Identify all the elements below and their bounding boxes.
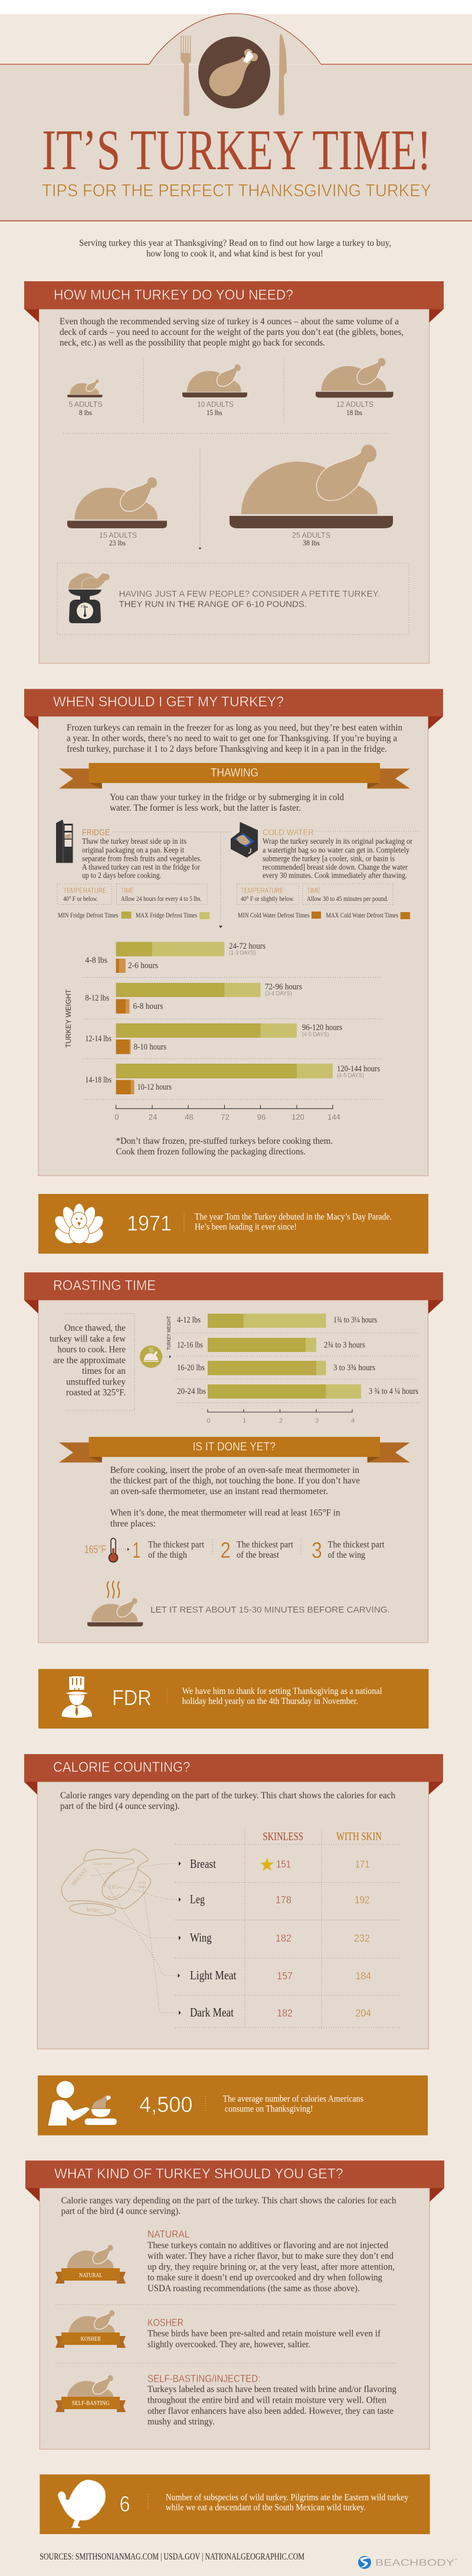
- row 20-24 lbs: 20-24 lbs: [177, 1387, 206, 1396]
- icon: turkey 5 adults: [67, 379, 103, 397]
- fridge temperature and time boxes: [57, 884, 207, 904]
- label: 12 adults: 18 lbs: [346, 408, 362, 417]
- fridge method: up to 2 days before cooking.: [82, 871, 162, 880]
- self-basting description: SELF-BASTING/INJECTED:: [148, 2373, 260, 2384]
- axis: 4: [351, 1417, 355, 1424]
- cold water method: [263, 828, 420, 880]
- natural description: NATURAL: [148, 2228, 190, 2240]
- row 12-16 lbs: 12-16 lbs: [177, 1341, 203, 1350]
- row 14-18 lbs: 120-144 hours: [337, 1064, 380, 1074]
- row 12-14 lbs: 12-14 lbs: [85, 1034, 112, 1044]
- icon: fridge: [56, 820, 73, 863]
- row 14-18 lbs: [85, 1064, 380, 1094]
- text block: Calorie ranges vary depending on the part of the turkey. This chart shows the calories for each: [61, 2196, 396, 2206]
- row: wing: 232: [354, 1932, 370, 1944]
- row 4-12 lbs: 1¾ to 3¼ hours: [333, 1315, 377, 1325]
- label: 25 adults: 25 ADULTS: [292, 531, 330, 539]
- row: leg: 192: [355, 1894, 369, 1906]
- row: dark meat: [190, 2005, 371, 2019]
- icon: natural turkey badge: [55, 2244, 126, 2284]
- cold water method: submerge the turkey [a cooler, sink, or basin is: [263, 854, 395, 863]
- label: 10 adults: 15 lbs: [206, 408, 222, 417]
- text block: hours to cook. Here: [58, 1344, 126, 1355]
- text block: We have him to thank for setting Thanksgiving as a national: [182, 1686, 382, 1696]
- text block: Calorie ranges vary depending on the part of the turkey. This chart shows the calories for each: [60, 1791, 395, 1801]
- cold water method: COLD WATER: [263, 828, 314, 837]
- cold water method: recommended] breast side down. Change the water: [263, 863, 408, 871]
- axis: 144: [327, 1113, 340, 1121]
- sources: SOURCES: SMITHSONIANMAG.COM | USDA.GOV | NATIONALGEOGRAPHIC.COM: [40, 2552, 304, 2562]
- diagram: turkey parts: DARK: [139, 1881, 146, 1885]
- label: 10 adults: [197, 400, 234, 417]
- text block: You can thaw your turkey in the fridge or by submerging it in cold: [110, 792, 344, 802]
- label: 5 adults: 5 ADULTS: [68, 400, 103, 409]
- axis: 72: [221, 1113, 230, 1121]
- axis: 2: [279, 1417, 283, 1424]
- cold water method: every 30 minutes. Cook immediately after thawing.: [263, 871, 407, 880]
- intro text: [79, 238, 391, 259]
- text block: an oven-safe thermometer, use an instant read thermometer.: [110, 1486, 328, 1496]
- cold water temperature and time boxes: [237, 884, 393, 904]
- bar chart: defrost times: [64, 942, 383, 1121]
- thermometer reading: [84, 1538, 129, 1562]
- icon: turkey 12 adults: [316, 357, 394, 397]
- step 1: of the thigh: [148, 1550, 187, 1560]
- number: 6: [119, 2492, 130, 2516]
- label: 25 adults: [292, 531, 330, 547]
- icon: self-basting turkey badge: SELF-BASTING: [72, 2400, 110, 2407]
- self-basting description: [148, 2373, 396, 2427]
- text block: [60, 317, 404, 348]
- text block: roasted at 325°F.: [66, 1388, 126, 1397]
- step 2: [221, 1538, 294, 1563]
- cold water method: a watertight bag so no water can get in. Completely: [263, 845, 409, 854]
- icon: kosher turkey badge: KOSHER: [81, 2335, 101, 2343]
- fridge method: A thawed turkey can rest in the fridge for: [82, 863, 200, 871]
- row: breast: 151: [276, 1858, 291, 1870]
- diagram: turkey parts: MEAT: [139, 1886, 147, 1889]
- row 16-20 lbs: 16-20 lbs: [177, 1363, 205, 1373]
- diagram: turkey parts: LEG: [109, 1884, 119, 1890]
- icon: scale with petite turkey: 7 lbs: [81, 606, 88, 609]
- text block: The year Tom the Turkey debuted in the Macy’s Day Parade.: [195, 1212, 392, 1222]
- legend: MIN Fridge Defrost Times: [58, 911, 119, 919]
- icon: turkey fan: [51, 1203, 107, 1246]
- label: 15 adults: 23 lbs: [109, 538, 126, 547]
- fridge method: original packaging on a pan. Keep it: [82, 845, 184, 854]
- callout: petite turkey: THEY RUN IN THE RANGE OF 6-10 POUNDS.: [119, 599, 307, 610]
- header banner: [0, 14, 472, 222]
- text block: part of the bird (4 ounce serving).: [60, 1801, 180, 1811]
- row 12-14 lbs: 8-10 hours: [133, 1042, 166, 1052]
- row 4-8 lbs: 2-6 hours: [128, 961, 158, 970]
- axis: 1: [242, 1417, 246, 1424]
- row 12-14 lbs: (4-5 DAYS): [302, 1032, 329, 1038]
- icon: plate with drumstick: [198, 37, 270, 108]
- icon: turkey 25 adults: [230, 443, 393, 528]
- row: wing: 182: [276, 1932, 291, 1944]
- row: leg: Leg: [190, 1892, 205, 1906]
- panel: how much turkey: [24, 281, 444, 663]
- row 8-12 lbs: 6-8 hours: [133, 1002, 163, 1011]
- axis: 0: [114, 1113, 119, 1121]
- row 12-16 lbs: 2¾ to 3 hours: [324, 1341, 365, 1350]
- label: 15 adults: [99, 531, 137, 547]
- row 12-14 lbs: 96-120 hours: [302, 1023, 342, 1032]
- fact band: 4,500: [38, 2075, 428, 2136]
- row 12-16 lbs: [177, 1338, 365, 1352]
- text block: [195, 1212, 392, 1232]
- axis: 3: [315, 1417, 319, 1424]
- footnote: Cook them frozen following the packaging directions.: [116, 1147, 306, 1157]
- icon: turkey 15 adults: [67, 476, 167, 528]
- table grid: [175, 1828, 401, 2030]
- icon: cooler: [231, 822, 258, 858]
- panel: when should I get my turkey: [24, 689, 443, 1176]
- step 1: The thickest part: [148, 1540, 205, 1549]
- row: light meat: 184: [355, 1970, 371, 1982]
- fridge method: separate from fresh fruits and vegetables.: [82, 854, 202, 863]
- row 14-18 lbs: 14-18 lbs: [85, 1075, 112, 1085]
- text block: deck of cards – you need to account for the weight of the parts you don’t eat (the giblets, bones,: [60, 327, 404, 337]
- diagram: turkey parts: [61, 1849, 150, 1917]
- icon: self-basting turkey badge: [55, 2374, 126, 2412]
- axis: [207, 1409, 355, 1424]
- row 12-14 lbs: [85, 1023, 342, 1054]
- heading: WHEN SHOULD I GET MY TURKEY?: [53, 694, 284, 710]
- icon: star: [260, 1858, 274, 1871]
- natural description: [148, 2228, 395, 2294]
- text block: He’s been leading it ever since!: [195, 1222, 297, 1232]
- icon: person eating: [48, 2081, 117, 2126]
- row 16-20 lbs: 3 to 3¾ hours: [333, 1363, 375, 1373]
- icon: turkey 10 adults: [182, 363, 247, 397]
- text block: Before cooking, insert the probe of an oven-safe meat thermometer in: [110, 1465, 359, 1475]
- kosher description: KOSHER: [148, 2317, 183, 2328]
- text block: Even though the recommended serving size of turkey is 4 ounces – about the same volume of a: [60, 317, 399, 327]
- label: 15 adults: 15 ADULTS: [99, 531, 137, 539]
- axis: 0: [207, 1417, 211, 1424]
- cold water method: Wrap the turkey securely in its original packaging or: [263, 837, 412, 845]
- fridge method: FRIDGE: [82, 828, 110, 837]
- axis: 24: [149, 1113, 157, 1121]
- fridge temperature and time boxes: 40° F or below.: [63, 894, 98, 903]
- row: leg: 178: [276, 1894, 291, 1906]
- axis: 96: [257, 1113, 266, 1121]
- cold water temperature and time boxes: TEMPERATURE: [241, 886, 284, 895]
- ribbon: thawing: [59, 763, 410, 789]
- text block: times for an: [82, 1366, 126, 1376]
- text block: fresh turkey, purchase it 1 to 2 days before Thanksgiving and keep it in a pan in the fridge.: [67, 744, 387, 754]
- axis label: TURKEY WEIGHT: [166, 1316, 172, 1350]
- text block: the thickest part of the thigh, not touching the bone. If you don’t have: [110, 1476, 360, 1486]
- text block: Frozen turkeys can remain in the freezer for as long as you need, but they’re best eaten within: [67, 723, 402, 733]
- heading: WHAT KIND OF TURKEY SHOULD YOU GET?: [54, 2166, 343, 2182]
- fact band: FDR: [38, 1669, 428, 1729]
- step 3: The thickest part: [328, 1540, 385, 1549]
- row 20-24 lbs: 3 ¾ to 4 ¼ hours: [369, 1387, 418, 1396]
- icon: thermometer: [109, 1538, 118, 1562]
- text block: The average number of calories Americans: [223, 2094, 363, 2104]
- panel: calorie counting: [24, 1754, 443, 2049]
- legend: [58, 911, 410, 919]
- label: 12 adults: 12 ADULTS: [336, 400, 373, 409]
- self-basting description: mushy and stringy.: [148, 2417, 215, 2427]
- step 2: The thickest part: [237, 1540, 294, 1549]
- heading: ROASTING TIME: [53, 1278, 156, 1294]
- step 3: [312, 1538, 385, 1563]
- panel: what kind of turkey: [25, 2160, 444, 2449]
- text block: three places:: [110, 1519, 156, 1529]
- kosher description: These birds have been pre-salted and retain moisture well even if: [148, 2329, 381, 2338]
- natural description: to make sure it doesn’t end up overcooked and dry when following: [148, 2272, 382, 2283]
- row 4-12 lbs: 4-12 lbs: [177, 1315, 201, 1325]
- legend: MAX Cold Water Defrost Times: [326, 911, 398, 919]
- row: wing: [190, 1930, 370, 1945]
- fridge temperature and time boxes: TIME: [121, 886, 134, 895]
- footnote: *Don’t thaw frozen, pre-stuffed turkeys before cooking them.: [116, 1136, 333, 1146]
- row: light meat: 157: [277, 1970, 293, 1982]
- label: 12 adults: [336, 400, 373, 417]
- icon: Uncle Sam figure: [62, 1676, 92, 1718]
- name: FDR: [112, 1686, 152, 1710]
- text block: [67, 723, 402, 754]
- icon: scale with petite turkey: [68, 573, 110, 623]
- icon: fork: [181, 35, 191, 116]
- self-basting description: throughout the entire bird and will retain moisture very well. Often: [148, 2395, 386, 2406]
- step 3: of the wing: [328, 1550, 365, 1560]
- natural description: These turkeys contain no additives or flavoring and are not injected: [148, 2241, 388, 2251]
- text block: water. The former is less work, but the latter is faster.: [110, 803, 301, 813]
- fact band: 1971: [38, 1194, 428, 1254]
- axis: [114, 1105, 340, 1121]
- ribbon: is it done yet: [59, 1437, 410, 1462]
- text block: [182, 1686, 382, 1706]
- callout: petite turkey: [119, 589, 380, 610]
- text block: [61, 2196, 396, 2216]
- text block: Once thawed, the: [64, 1323, 126, 1333]
- text block: turkey will take a few: [50, 1334, 126, 1344]
- cold water temperature and time boxes: TIME: [307, 886, 320, 895]
- text block: part of the bird (4 ounce serving).: [61, 2206, 181, 2216]
- ribbon: thawing: THAWING: [211, 766, 258, 779]
- text block: Number of subspecies of wild turkey. Pilgrims ate the Eastern wild turkey: [166, 2493, 409, 2502]
- row 8-12 lbs: [85, 982, 302, 1014]
- row: dark meat: 204: [355, 2007, 371, 2019]
- axis: 48: [185, 1113, 194, 1121]
- text block: neck, etc.) as well as the possibility that people might go back for seconds.: [60, 338, 325, 348]
- row 14-18 lbs: (4-5 DAYS): [337, 1072, 364, 1079]
- logo: Beachbody: [358, 2556, 457, 2569]
- axis: 120: [291, 1113, 304, 1121]
- bar chart: roasting times: [166, 1314, 420, 1424]
- text block: [110, 1465, 360, 1529]
- ribbon: is it done yet: IS IT DONE YET?: [192, 1440, 276, 1453]
- row 16-20 lbs: [177, 1361, 375, 1375]
- diagram: turkey parts: WING: [86, 1906, 101, 1914]
- panel: roasting time: [24, 1272, 443, 1643]
- logo: Beachbody: BEACHBODY: [375, 2558, 454, 2568]
- step 2: of the breast: [237, 1550, 280, 1560]
- row: dark meat: 182: [277, 2007, 293, 2019]
- intro text: how long to cook it, and what kind is best for you!: [146, 249, 323, 259]
- row 4-8 lbs: [85, 942, 266, 973]
- self-basting description: other flavor enhancers have also been added. However, they can taste: [148, 2406, 394, 2416]
- fridge method: Thaw the turkey breast side up in its: [82, 837, 186, 845]
- icon: resting turkey with steam: [87, 1581, 143, 1626]
- fridge temperature and time boxes: Allow 24 hours for every 4 to 5 lbs.: [121, 894, 202, 903]
- text block: while we eat a descendant of the South Mexican wild turkey.: [166, 2502, 366, 2513]
- label: 25 adults: 38 lbs: [303, 538, 320, 547]
- label: 5 adults: [68, 400, 103, 417]
- row 8-12 lbs: 8-12 lbs: [85, 993, 109, 1003]
- fridge temperature and time boxes: TEMPERATURE: [63, 886, 107, 895]
- column headers: SKINLESS: [263, 1830, 303, 1843]
- number: 1971: [127, 1211, 172, 1235]
- fact band: 6 subspecies: [40, 2475, 430, 2534]
- kosher description: [148, 2317, 381, 2350]
- step 2: 2: [221, 1538, 231, 1563]
- icon: roasting badge: [137, 1345, 171, 1368]
- row 4-8 lbs: (1-3 DAYS): [229, 950, 256, 956]
- row: dark meat: Dark Meat: [190, 2005, 234, 2019]
- text block: When it’s done, the meat thermometer will read at least 165°F in: [110, 1508, 340, 1518]
- row 4-8 lbs: 24-72 hours: [229, 942, 266, 951]
- row 4-8 lbs: 4-8 lbs: [85, 956, 107, 965]
- intro text: Serving turkey this year at Thanksgiving? Read on to find out how large a turkey to buy,: [79, 238, 391, 248]
- callout: let it rest: LET IT REST ABOUT 15-30 MINUTES BEFORE CARVING.: [150, 1605, 390, 1615]
- row 14-18 lbs: 10-12 hours: [137, 1083, 172, 1092]
- subtitle: TIPS FOR THE PERFECT THANKSGIVING TURKEY: [42, 181, 431, 200]
- row: breast: 171: [355, 1858, 369, 1870]
- text block: [60, 1791, 395, 1811]
- icon: knife: [278, 34, 287, 116]
- text block: are the approximate: [53, 1356, 126, 1366]
- natural description: USDA roasting recommendations (the same as those above).: [148, 2284, 360, 2294]
- number: 4,500: [139, 2093, 192, 2117]
- text block: a year. In other words, there’s no need to wait to get one for Thanksgiving. If you’re buying a: [67, 733, 397, 743]
- text block: consume on Thanksgiving!: [225, 2104, 313, 2114]
- step 3: 3: [312, 1538, 322, 1563]
- row: light meat: [190, 1968, 371, 1982]
- kosher description: slightly overcooked. They are, however, saltier.: [148, 2340, 310, 2350]
- step 1: [132, 1538, 205, 1563]
- row 8-12 lbs: 72-96 hours: [265, 982, 302, 992]
- heading: HOW MUCH TURKEY DO YOU NEED?: [54, 287, 293, 303]
- row 20-24 lbs: [177, 1384, 418, 1399]
- logo: Beachbody: ®: [455, 2558, 457, 2562]
- heading: CALORIE COUNTING?: [53, 1759, 190, 1775]
- natural description: with water. They have a richer flavor, but to make sure they don’t end: [148, 2251, 394, 2261]
- row: breast: [190, 1857, 369, 1871]
- row: light meat: Light Meat: [190, 1968, 237, 1982]
- axis label: TURKEY WEIGHT: [64, 989, 73, 1048]
- top white strip: [0, 0, 472, 14]
- arch: [149, 14, 321, 64]
- icon: natural turkey badge: NATURAL: [79, 2272, 103, 2279]
- thermometer reading: 165°F: [84, 1544, 106, 1555]
- callout: petite turkey: HAVING JUST A FEW PEOPLE? CONSIDER A PETITE TURKEY.: [119, 589, 380, 599]
- text block: [166, 2493, 409, 2513]
- step 1: 1: [132, 1538, 140, 1563]
- connectors: [92, 1861, 181, 2015]
- diagram: turkey parts: LIGHT MEAT: [93, 1863, 113, 1866]
- row: wing: Wing: [190, 1930, 212, 1945]
- row: leg: [190, 1892, 369, 1906]
- column headers: WITH SKIN: [336, 1830, 382, 1843]
- text block: holiday held yearly on the 4th Thursday in November.: [182, 1696, 358, 1706]
- natural description: up dry, they require brining or, at the very least, after more attention,: [148, 2262, 395, 2272]
- footnote: [116, 1136, 333, 1157]
- column headers: [263, 1830, 382, 1843]
- text block: [223, 2094, 363, 2114]
- text block: [110, 792, 344, 813]
- legend: MIN Cold Water Defrost Times: [238, 911, 310, 919]
- row 4-12 lbs: [177, 1314, 377, 1328]
- cold water temperature and time boxes: Allow 30 to 45 minutes per pound.: [307, 894, 388, 903]
- fridge method: [82, 828, 233, 928]
- text block: [50, 1323, 126, 1397]
- icon: wild turkey silhouette: [58, 2480, 105, 2528]
- row: breast: Breast: [190, 1857, 216, 1871]
- row 8-12 lbs: (3-4 DAYS): [265, 991, 292, 997]
- label: 10 adults: 10 ADULTS: [197, 400, 234, 409]
- diagram: turkey parts: BREAST: [70, 1867, 88, 1887]
- cold water temperature and time boxes: 40° F or slightly below.: [241, 894, 294, 903]
- self-basting description: Turkeys labeled as such have been treated with brine and/or flavoring: [148, 2384, 396, 2394]
- text block: unstuffed turkey: [66, 1377, 126, 1387]
- label: 5 adults: 8 lbs: [79, 408, 92, 417]
- icon: kosher turkey badge: [55, 2309, 126, 2348]
- legend: MAX Fridge Defrost Times: [136, 911, 197, 919]
